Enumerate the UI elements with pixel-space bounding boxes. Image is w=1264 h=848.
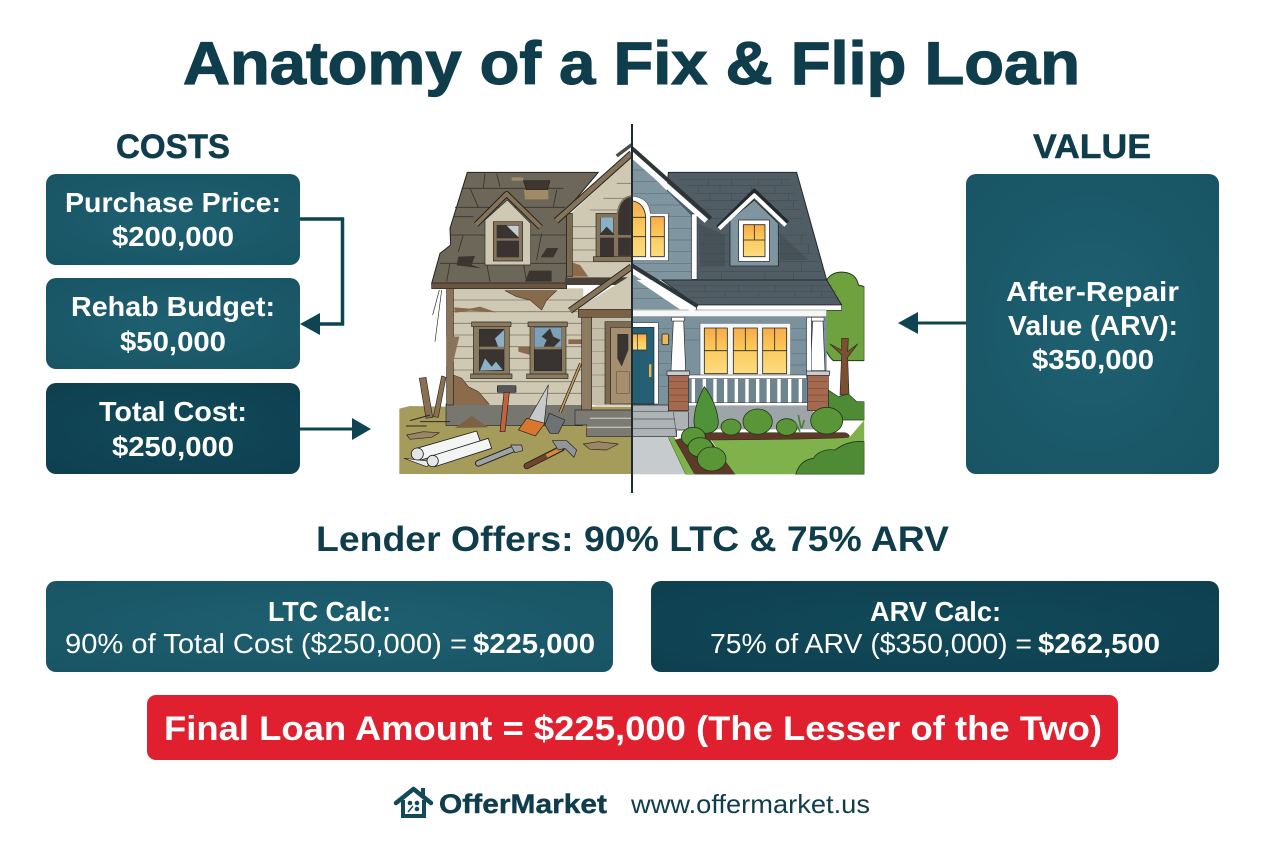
panel: purchase price xyxy=(46,174,300,265)
tree xyxy=(823,272,864,420)
arrow: total cost to house xyxy=(300,418,371,440)
walkway xyxy=(632,437,686,474)
window: broken lower left xyxy=(471,322,512,379)
icon: wrench xyxy=(478,445,523,463)
panel: LTC calculation: LTC Calc: xyxy=(268,596,391,627)
panel: total cost xyxy=(46,383,300,474)
illustration: house before and after xyxy=(399,124,864,493)
panel: after-repair value: $350,000 xyxy=(1032,344,1154,375)
title: Anatomy of a Fix & Flip Loan xyxy=(183,30,1080,97)
panel: total cost: Total Cost: xyxy=(99,396,247,427)
porch xyxy=(570,267,633,410)
illustration: renovated right half xyxy=(630,148,864,474)
window: broken lower right xyxy=(527,322,568,379)
dormer xyxy=(476,194,541,265)
porch railing xyxy=(688,375,808,406)
panel: ARV calculation: $262,500 xyxy=(1038,628,1160,659)
panel: rehab budget xyxy=(46,278,300,369)
callout: final loan amount xyxy=(147,695,1118,760)
footer logo icon: house xyxy=(396,788,431,816)
lawn xyxy=(710,420,864,474)
dormer xyxy=(718,191,788,266)
icon: shovel xyxy=(545,363,581,433)
porch lamp xyxy=(662,334,669,345)
front door xyxy=(630,323,658,404)
panel: rehab budget: $50,000 xyxy=(120,326,226,357)
panel: LTC calculation: 90% of Total Cost ($250,000) = xyxy=(65,628,467,659)
panel: total cost: $250,000 xyxy=(112,431,234,462)
front steps xyxy=(632,405,688,437)
illustration: run-down left half xyxy=(399,145,633,474)
picture window xyxy=(700,323,791,375)
upper windows xyxy=(632,196,668,261)
lower wall xyxy=(632,317,827,405)
panel: after-repair value xyxy=(966,174,1219,474)
porch gable xyxy=(633,280,680,310)
footer website: www.offermarket.us xyxy=(630,789,870,819)
center divider line xyxy=(631,124,633,493)
panel: ARV calculation: 75% of ARV ($350,000) = xyxy=(710,628,1032,659)
foundation xyxy=(688,406,813,429)
arrow: value to house xyxy=(898,312,966,334)
panel: rehab budget: Rehab Budget: xyxy=(71,291,275,322)
broken steps xyxy=(575,405,633,437)
lower roof xyxy=(662,280,842,305)
columns and brick piers xyxy=(667,317,830,411)
panel: purchase price: $200,000 xyxy=(112,221,234,252)
footer brand name: OfferMarket xyxy=(439,789,607,819)
upper gable wall xyxy=(572,157,632,277)
callout: final loan amount: Final Loan Amount = $225,000 (The Lesser of the Two) xyxy=(164,710,1102,748)
mulch bed xyxy=(675,433,849,474)
panel: after-repair value: Value (ARV): xyxy=(1008,310,1178,341)
gable trim and post xyxy=(567,213,572,277)
panel: LTC calculation xyxy=(46,581,613,672)
panel: ARV calculation xyxy=(651,581,1219,672)
icon: hand saw xyxy=(518,385,548,436)
heading: costs: COSTS xyxy=(116,128,230,166)
panel: LTC calculation: $225,000 xyxy=(473,628,595,659)
panel: purchase price: Purchase Price: xyxy=(65,187,281,218)
roof xyxy=(432,172,598,283)
heading: lender offers: Lender Offers: 90% LTC & 75% ARV xyxy=(316,520,950,559)
heading: value: VALUE xyxy=(1033,128,1151,166)
arrow: purchase price to rehab budget xyxy=(300,219,342,335)
panel: after-repair value: After-Repair xyxy=(1006,276,1179,307)
broken fence boards xyxy=(406,376,488,428)
icon: sledge hammer xyxy=(497,386,516,432)
upper gable wall xyxy=(632,155,692,280)
upper roof xyxy=(662,172,827,280)
panel: ARV calculation: ARV Calc: xyxy=(870,596,1001,627)
shrubs xyxy=(681,387,864,474)
upper window xyxy=(593,196,633,262)
debris xyxy=(407,432,618,450)
icon: claw hammer xyxy=(527,441,577,466)
icon: blueprint rolls xyxy=(404,431,492,467)
